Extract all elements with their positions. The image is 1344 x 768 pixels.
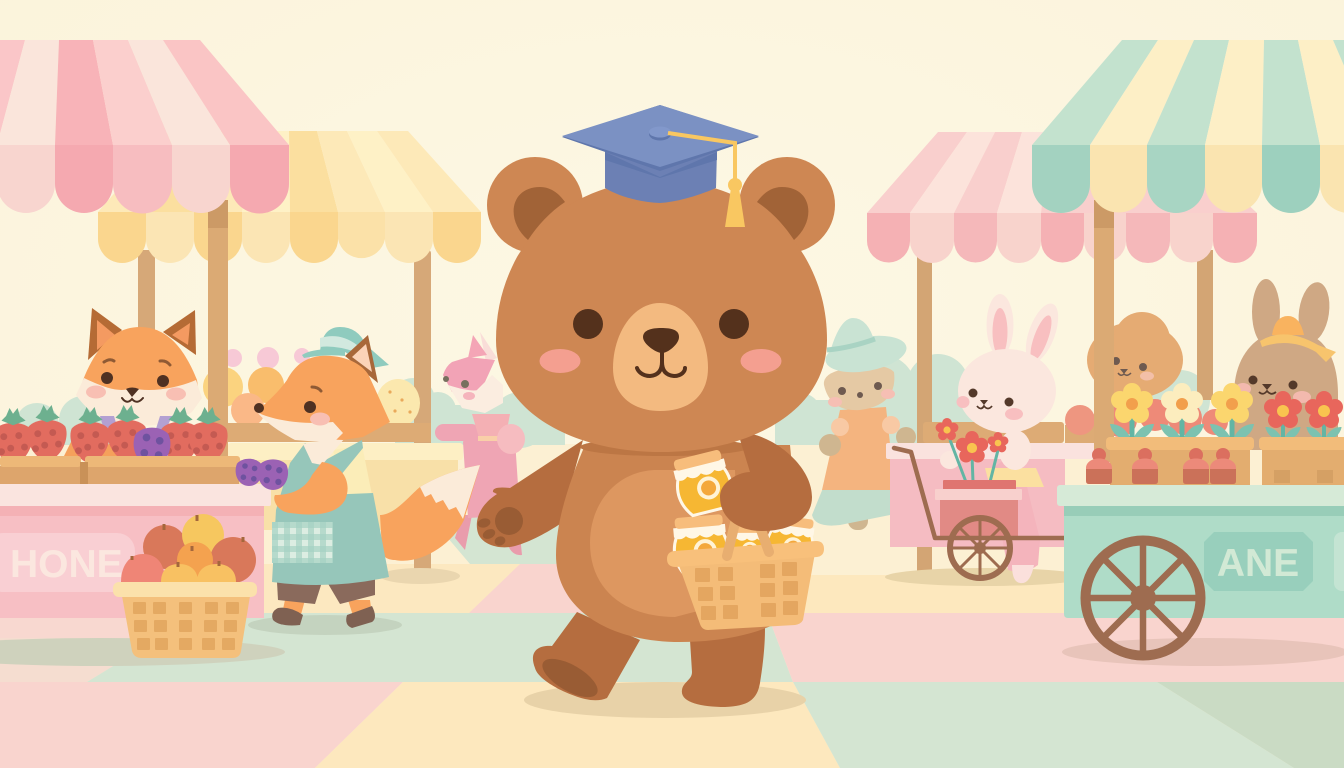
legs xyxy=(533,612,765,707)
awning: front pink xyxy=(0,40,289,214)
body xyxy=(556,445,805,642)
ground checker tiles xyxy=(0,444,1344,768)
shopper bear with mint hat xyxy=(812,318,916,530)
back-right stall counter xyxy=(886,405,1105,547)
strawberries and grapes xyxy=(0,405,228,465)
awning: front pink post xyxy=(208,200,228,462)
left ground shadow xyxy=(0,638,285,666)
cart shadow xyxy=(885,568,1085,586)
head xyxy=(496,180,827,452)
background bushes xyxy=(15,354,1210,448)
cupcakes xyxy=(1086,448,1236,484)
honey jars xyxy=(670,448,816,576)
mint cart xyxy=(1057,485,1344,618)
legs and feet xyxy=(272,578,375,628)
back-left stall counter and fruit xyxy=(203,347,463,530)
flower crates xyxy=(1106,383,1344,485)
background pink fox shopper xyxy=(435,332,525,555)
fox vendor behind stall xyxy=(64,308,202,458)
pink flower cart xyxy=(894,448,1064,578)
cheeks xyxy=(540,349,782,373)
grapes held xyxy=(236,459,288,490)
tail xyxy=(380,465,480,561)
awning: back pink xyxy=(867,132,1257,263)
arm xyxy=(274,462,348,515)
awning: front mint and yellow xyxy=(1032,40,1344,213)
fox shopper xyxy=(236,327,480,628)
pink stall counter xyxy=(0,484,271,638)
tomato pile xyxy=(1103,399,1228,437)
ears xyxy=(487,157,835,253)
left crates xyxy=(0,456,240,484)
main bear xyxy=(477,105,835,718)
nose and mouth xyxy=(637,328,685,376)
stall: back pink posts xyxy=(917,250,1213,578)
honey basket xyxy=(667,523,824,630)
graduation cap xyxy=(562,105,759,227)
right arm and hand xyxy=(720,433,812,531)
flower bouquet xyxy=(936,418,1008,482)
awning: back yellow xyxy=(98,131,481,263)
cart wheel xyxy=(1085,540,1201,656)
belly xyxy=(590,470,740,617)
front right post xyxy=(1094,200,1114,462)
rabbit with bouquet xyxy=(940,294,1065,583)
poodle vendor xyxy=(1087,312,1183,398)
mint cart shadow xyxy=(1062,638,1344,666)
chin shadow xyxy=(580,438,750,456)
apron and shirt xyxy=(272,438,389,585)
left arm and paw xyxy=(477,440,583,547)
stall: back yellow, posts xyxy=(138,250,431,578)
ground shadow xyxy=(524,682,806,718)
sign text: ANE: ANE xyxy=(1217,542,1299,585)
head xyxy=(254,327,390,443)
fox shadow and stall pole shadow xyxy=(248,568,460,635)
tan rabbit vendor xyxy=(1234,279,1338,450)
muzzle xyxy=(613,303,708,411)
eyes xyxy=(573,309,749,339)
fruit basket xyxy=(113,514,257,658)
sign text: HONE: HONE xyxy=(10,543,123,586)
